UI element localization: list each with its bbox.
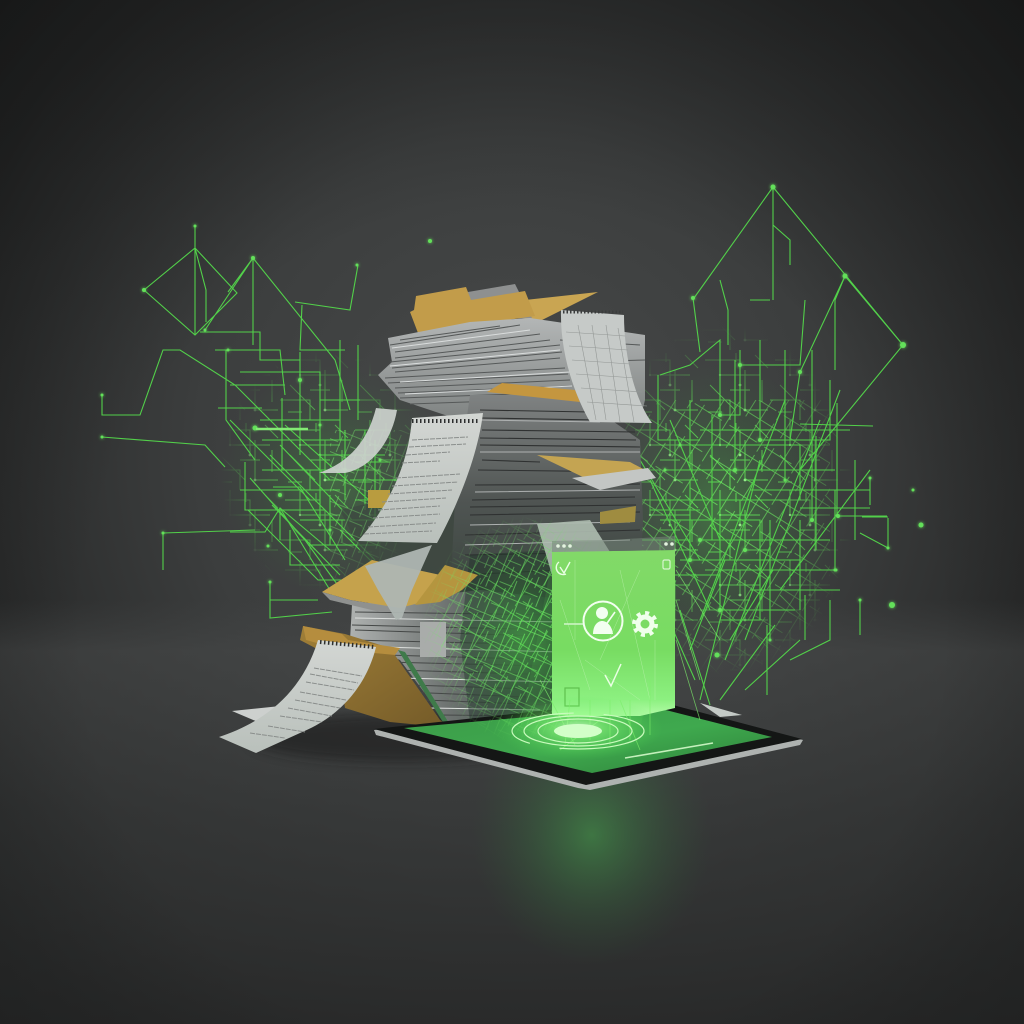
right yellow folder [415,565,478,605]
floor reflection: green light [472,705,712,965]
network: right circuit lines [640,187,903,705]
small yellow insert behind sheet [368,490,390,508]
sheet: bottom left spiral page [219,640,376,753]
yellow insert lower right [600,506,636,524]
upper paper section [378,318,645,420]
green glow: right cloud [600,360,840,660]
lower paper section [350,590,570,728]
hologram light: vertical beam [520,560,676,730]
sheet: calendar stub behind hologram [537,520,610,575]
bottom folder [300,626,452,728]
sheet: bottom left under page [232,705,290,722]
green mesh second layer [430,520,582,730]
network: dense mesh left [224,355,411,586]
green particles over tablet [540,570,720,750]
floor shadow under stack [250,714,550,762]
outlined square [565,688,579,706]
green glow: left cloud [220,365,450,595]
green mesh over lower stack [426,520,573,731]
hologram panel [552,536,675,716]
connector line [564,623,583,625]
tablet emitter rings [512,713,644,749]
hologram title strip [552,536,675,552]
window dots [556,542,674,548]
sheet: calendar page top right [561,310,652,423]
icon: small badge [663,560,670,569]
sheet: small left flying page [319,408,397,473]
network: bright trace left [256,428,308,430]
network: fine diagonal mesh right [624,400,830,668]
folder edge pages [322,592,415,612]
hologram base glow [493,696,663,760]
stack of papers and folders [300,284,656,728]
left yellow folder [322,560,445,608]
ghost papers behind flying sheet [340,480,480,600]
network: left circuit lines [102,225,420,618]
grey sheet under insert [572,468,656,490]
icon: small check shield [556,562,570,575]
tablet [374,699,803,790]
yellow insert middle [537,455,645,478]
floor plane [0,600,1024,1024]
sheet: large spiral page with text [358,413,483,543]
sheet corner right of tablet [700,703,742,717]
hologram scratches [560,560,655,700]
icon: gear [634,613,656,635]
yellow insert upper [487,383,580,402]
sheet: folded page [365,545,432,620]
green glow over lower stack [452,545,592,735]
top folder [410,284,598,333]
ghost mesh over ghost papers [330,430,410,581]
network: junction dots [100,184,924,658]
icon: user circle [584,602,622,640]
icon: check mark [605,664,621,686]
middle paper section [450,395,643,605]
dark zone of lower stack [460,550,552,722]
network: dense mesh right [635,331,850,668]
small white tag [420,622,446,657]
